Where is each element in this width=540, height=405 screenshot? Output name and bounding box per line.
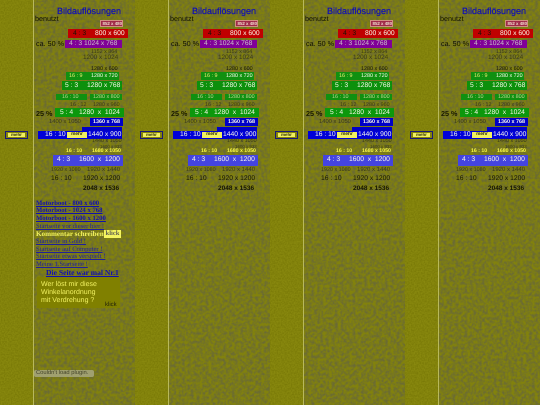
panel: column 2: ca. 50 % xyxy=(171,39,199,48)
panel: column 4: benutzt xyxy=(440,14,464,23)
panel: column 1: Startseite in Gold ! xyxy=(36,238,86,245)
panel: column 2: 4 : 3 1024 x 768 xyxy=(204,40,252,47)
panel: column 3: 1280 x 800 xyxy=(363,94,390,100)
panel: column 2: 1920 x 1440 xyxy=(222,167,255,173)
panel: column 4: 16 : 9 xyxy=(474,73,488,79)
panel: column 3: 852 x 480 xyxy=(372,20,392,26)
panel: column 4: 1400 x 1050 xyxy=(454,119,486,125)
panel: column 4: 25 % xyxy=(441,109,457,118)
panel: column 2: 1280 x 768 xyxy=(222,82,255,88)
panel: column 1: 800 x 600 xyxy=(95,30,125,36)
panel: column 1: Motorboot - 1024 x 768 xyxy=(36,207,102,214)
panel: column 3: 4 : 3 xyxy=(327,156,340,163)
panel: column 1: 1280 x 800 xyxy=(93,94,120,100)
panel: column 2: 1920 x 1080 xyxy=(186,167,216,173)
panel: column 3: 1280 x 768 xyxy=(357,82,390,88)
panel: column 3: 16 : 12 xyxy=(340,102,356,108)
panel: column 2: 16 : 10 xyxy=(201,148,217,154)
panel: column 2: 1200 x 1024 xyxy=(218,54,253,61)
panel: column 3: 1680 x 1050 xyxy=(362,148,391,154)
panel: column 4: 16 : 10 xyxy=(450,131,471,138)
panel: column 4: 1920 x 1440 xyxy=(492,167,525,173)
panel: column 4: 1280 x 720 xyxy=(496,73,523,79)
button: mehr column 3 margin xyxy=(275,131,298,139)
panel: column 1: 4 : 3 xyxy=(57,156,70,163)
panel: column 3 xyxy=(305,6,398,192)
panel: column 1: 1152 x 864 xyxy=(91,49,117,55)
panel: column 4: mehr xyxy=(476,132,488,137)
panel: column 1: 1440 x 1050 xyxy=(92,138,122,144)
panel: column 3: 16 : 10 xyxy=(321,175,342,182)
panel: column 4: Bildauflösungen xyxy=(462,6,526,16)
panel: column 3: 4 : 3 1024 x 768 xyxy=(339,40,387,47)
panel: column 1: 1400 x 1050 xyxy=(49,119,81,125)
panel: column 4: 4 : 3 1024 x 768 xyxy=(474,40,522,47)
panel: column 1 xyxy=(34,6,128,377)
panel: column 1: 1440 x 900 xyxy=(88,131,121,138)
panel: column 2: 1360 x 768 xyxy=(228,119,255,125)
plugin notice: Couldn't load plugin. xyxy=(36,370,88,376)
panel: column 1: mehr xyxy=(71,132,83,137)
panel: column 1: 1200 x 1024 xyxy=(83,54,118,61)
panel: column 3: 1600 x 1200 xyxy=(349,156,390,163)
panel: column 1: 1280 x 1024 xyxy=(79,108,120,116)
panel: column 1: 1280 x 600 xyxy=(91,66,118,72)
panel: column 4: 852 x 480 xyxy=(508,20,527,26)
panel: column 2: 4 : 3 xyxy=(208,30,221,36)
panel: column 1: Motorboot - 1600 x 1200 xyxy=(36,215,106,222)
panel: column 2: 852 x 480 xyxy=(238,20,257,26)
panel: column 4: 5 : 3 xyxy=(470,82,483,88)
panel: column 3: 1440 x 900 xyxy=(358,131,391,138)
panel: column 1: 16 : 10 xyxy=(45,131,66,138)
panel: column 2: 1280 x 720 xyxy=(226,73,253,79)
panel: column 3: 16 : 10 xyxy=(336,148,352,154)
panel: column 3: 25 % xyxy=(306,109,322,118)
panel: column 3: 1280 x 960 xyxy=(363,102,390,108)
panel: column 3: 1280 x 600 xyxy=(361,66,388,72)
panel: column 2: 16 : 9 xyxy=(204,73,218,79)
button: mehr left margin xyxy=(5,131,28,139)
panel: column 4: 16 : 10 xyxy=(471,148,487,154)
panel: column 2: 4 : 3 xyxy=(192,156,205,163)
panel: column 1: Kommentar schreiben xyxy=(36,230,104,238)
panel: column 1: 16 : 10 xyxy=(66,148,82,154)
panel: column 4: 4 : 3 xyxy=(478,30,491,36)
panel: column 2: 5 : 3 xyxy=(200,82,213,88)
callout: Winkelanordnung xyxy=(41,289,95,296)
panel: column 1: 2048 x 1536 xyxy=(83,185,119,192)
button: mehr column 4 margin: mehr xyxy=(416,132,427,137)
callout: mit Verdrehung ? xyxy=(41,297,94,304)
panel: column 3: 1920 x 1080 xyxy=(321,167,351,173)
panel: column 3: 1200 x 1024 xyxy=(353,54,388,61)
panel: column 3: 1280 x 720 xyxy=(361,73,388,79)
panel: column 3: 16 : 10 xyxy=(315,131,336,138)
callout: klick xyxy=(105,302,117,308)
panel: column 2: 1400 x 1050 xyxy=(184,119,216,125)
panel: column 4: 16 : 10 xyxy=(456,175,477,182)
panel: column 1: 16 : 12 xyxy=(70,102,86,108)
panel: column 1: Meine 1.Startseite ! xyxy=(36,261,88,268)
panel: column 2: benutzt xyxy=(170,14,194,23)
panel: column 1: 1280 x 768 xyxy=(87,82,120,88)
panel: column 2: 1680 x 1050 xyxy=(227,148,256,154)
panel: column 3: Bildauflösungen xyxy=(327,6,391,16)
panel: column 3: 1600 x 933 xyxy=(370,144,392,149)
panel: column 4: 1280 x 960 xyxy=(498,102,525,108)
panel: column 2: 1280 x 600 xyxy=(226,66,253,72)
panel: column 3: 1400 x 1050 xyxy=(319,119,351,125)
panel: column 4: 1680 x 1050 xyxy=(497,148,526,154)
panel: column 1: 16 : 10 xyxy=(62,94,78,100)
links: Motorboot - 800 x 600 xyxy=(36,200,99,207)
panel: column 2: 1280 x 1024 xyxy=(214,108,255,116)
panel: column 4: 4 : 3 xyxy=(462,156,475,163)
panel: column 4: 1280 x 1024 xyxy=(484,108,525,116)
panel: column 1: 1280 x 960 xyxy=(93,102,120,108)
panel: column 4: 1920 x 1080 xyxy=(456,167,486,173)
panel: column 3: benutzt xyxy=(305,14,329,23)
panel: column 1: 1680 x 1050 xyxy=(92,148,121,154)
panel: column 4: 1920 x 1200 xyxy=(488,175,525,182)
panel: column 1: Startseite auf Computer ! xyxy=(36,246,102,253)
panel: column 1: Startseite vor dieser hier ! xyxy=(36,223,104,230)
panel: column 3: 16 : 9 xyxy=(339,73,352,79)
panel: column 2: 800 x 600 xyxy=(230,30,260,36)
panel: column 1: 1920 x 1440 xyxy=(87,167,120,173)
panel: column 4: 16 : 10 xyxy=(467,94,484,100)
panel: column 4 xyxy=(440,6,533,192)
panel: column 1: ca. 50 % xyxy=(36,39,64,48)
panel: column 4: 1360 x 768 xyxy=(498,119,525,125)
panel: column 2 xyxy=(170,6,263,192)
panel: column 3: 1152 x 864 xyxy=(361,49,387,55)
panel: column 2: 5 : 4 xyxy=(195,108,208,116)
panel: column 2: 16 : 10 xyxy=(186,175,207,182)
panel: column 2: 1600 x 933 xyxy=(235,144,257,149)
panel: column 4: 1600 x 933 xyxy=(505,144,527,149)
panel: column 1: 5 : 3 xyxy=(65,82,78,88)
panel: column 3: 5 : 4 xyxy=(330,108,343,116)
button: mehr column 3 margin: mehr xyxy=(281,132,292,137)
panel: column 2: 16 : 12 xyxy=(205,102,222,108)
panel: column 1: 5 : 4 xyxy=(60,108,73,116)
panel: column 4: 1280 x 800 xyxy=(498,94,525,100)
panel: column 3: 1440 x 1050 xyxy=(362,138,392,144)
panel: column 1: 852 x 480 xyxy=(102,20,122,26)
panel: column 3: 5 : 3 xyxy=(335,82,348,88)
panel: column 2: 2048 x 1536 xyxy=(218,185,254,192)
panel: column 2: 16 : 10 xyxy=(180,131,201,138)
button: mehr left margin: mehr xyxy=(11,132,22,137)
panel: column 3: 1920 x 1440 xyxy=(357,167,390,173)
panel: column 3: mehr xyxy=(341,132,353,137)
panel: column 1: 1360 x 768 xyxy=(93,119,120,125)
panel: column 1: 1920 x 1080 xyxy=(51,167,81,173)
panel: column 4: 2048 x 1536 xyxy=(488,185,524,192)
panel: column 3: 1280 x 1024 xyxy=(349,108,390,116)
panel: column 2: 1280 x 800 xyxy=(228,94,255,100)
panel: column 2: 1440 x 900 xyxy=(223,131,256,138)
panel: column 4: 16 : 12 xyxy=(475,102,492,108)
panel: column 3: ca. 50 % xyxy=(306,39,334,48)
panel: column 3: 2048 x 1536 xyxy=(353,185,389,192)
panel: column 2: mehr xyxy=(206,132,218,137)
panel: column 2: 1152 x 864 xyxy=(226,49,252,55)
button: mehr column 2 margin: mehr xyxy=(146,132,157,137)
panel: column 4: 800 x 600 xyxy=(500,30,530,36)
heading: Bildauflösungen xyxy=(57,6,121,16)
button: mehr column 2 margin xyxy=(140,131,163,139)
panel: column 1: klick xyxy=(106,230,119,237)
panel: column 4: ca. 50 % xyxy=(441,39,469,48)
panel: column 1: 1600 x 1200 xyxy=(79,156,120,163)
panel: column 2: 1280 x 960 xyxy=(228,102,255,108)
callout: Wer löst mir diese xyxy=(41,281,97,288)
panel: column 2: 1600 x 1200 xyxy=(214,156,255,163)
panel: column 4: 1280 x 600 xyxy=(496,66,523,72)
panel: column 1: 25 % xyxy=(36,109,52,118)
panel: column 1: Die Seite war mal Nr.1 xyxy=(46,268,119,277)
panel: column 3: 1920 x 1200 xyxy=(353,175,390,182)
panel: column 3: 1360 x 768 xyxy=(363,119,390,125)
panel: column 3: 16 : 10 xyxy=(332,94,348,100)
panel: column 2: 1920 x 1200 xyxy=(218,175,255,182)
callout xyxy=(37,277,120,308)
panel: column 1: Startseite etwas verspielt ! xyxy=(36,253,105,260)
panel: column 3: 4 : 3 xyxy=(343,30,356,36)
panel: column 2: 25 % xyxy=(171,109,187,118)
panel: column 2: Bildauflösungen xyxy=(192,6,256,16)
panel: column 1: 16 : 10 xyxy=(51,175,72,182)
panel: column 4: 1152 x 864 xyxy=(496,49,522,55)
panel: column 1: 1920 x 1200 xyxy=(83,175,120,182)
panel: column 1: 1600 x 933 xyxy=(100,144,122,149)
panel: column 4: 5 : 4 xyxy=(465,108,478,116)
panel: column 1: 1280 x 720 xyxy=(91,73,118,79)
panel: column 4: 1440 x 1050 xyxy=(497,138,527,144)
panel: column 2: 16 : 10 xyxy=(197,94,214,100)
button: mehr column 4 margin xyxy=(410,131,433,139)
panel: column 4: 1200 x 1024 xyxy=(488,54,523,61)
panel: column 4: 1280 x 768 xyxy=(492,82,525,88)
panel: column 4: 1600 x 1200 xyxy=(484,156,525,163)
panel: column 3: 800 x 600 xyxy=(365,30,395,36)
panel: column 2: 1440 x 1050 xyxy=(227,138,257,144)
panel: column 1: 4 : 3 1024 x 768 xyxy=(69,40,117,47)
panel: column 1: 16 : 9 xyxy=(69,73,82,79)
panel: column 1: benutzt xyxy=(35,14,59,23)
panel: column 4: 1440 x 900 xyxy=(493,131,526,138)
panel: column 1: 4 : 3 xyxy=(73,30,86,36)
